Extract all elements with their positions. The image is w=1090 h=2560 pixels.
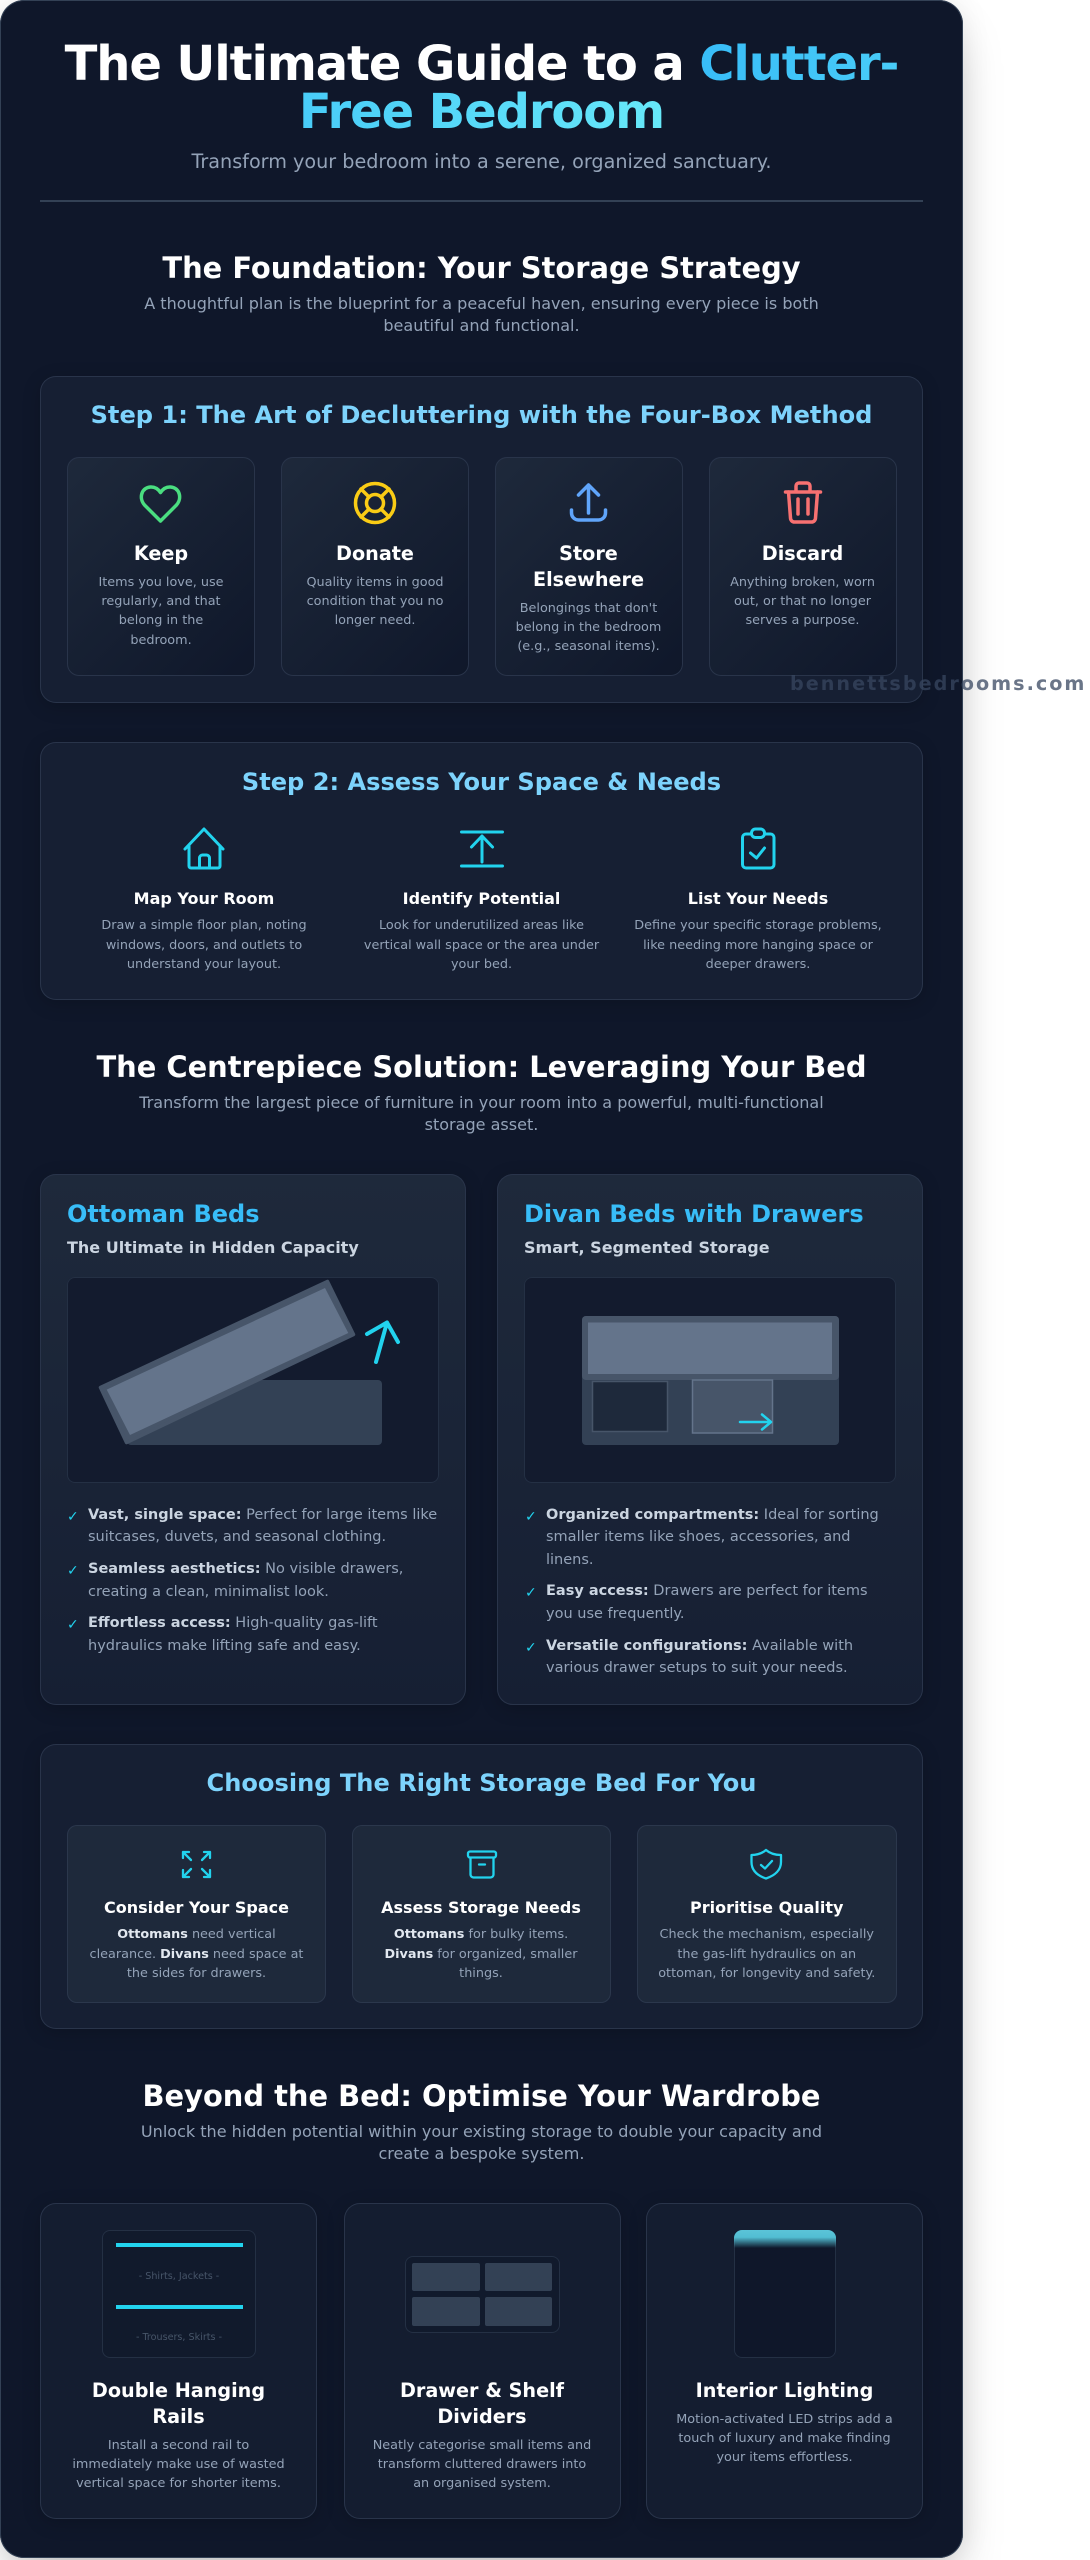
dividers title: Dividers — [437, 2405, 527, 2428]
section intro: centrepiece — [96, 1050, 867, 1134]
illustration: drawer dividers — [404, 2256, 560, 2333]
intro text — [144, 294, 819, 335]
map title — [101, 889, 307, 972]
panel: ottoman beds: ✓ — [67, 1617, 79, 1633]
panel: step 1 — [40, 376, 923, 703]
intro text: create a bespoke system. — [378, 2144, 584, 2163]
identify description — [364, 918, 600, 972]
upper rail — [116, 2243, 242, 2247]
divan title: Divan Beds with Drawers — [524, 1200, 864, 1228]
panel: choosing the right bed — [40, 1744, 923, 2029]
divan benefit 2: Easy access: Drawers are perfect for items — [546, 1583, 868, 1599]
rails title — [40, 2378, 317, 2430]
intro text: Transform the largest piece of furniture in your room into a powerful, multi-functional — [139, 1093, 824, 1112]
prioritise description — [637, 1925, 896, 1983]
discard description — [730, 575, 875, 628]
divan benefit 1: smaller items like shoes, accessories, and — [546, 1529, 851, 1545]
list description — [634, 918, 882, 972]
card: consider your space — [67, 1825, 326, 2003]
divan benefit 1: Organized compartments: Ideal for sorting — [546, 1507, 879, 1523]
ottoman benefit 1: Vast, single space: Perfect for large items like — [88, 1507, 437, 1523]
lighting description: touch of luxury and make finding — [678, 2431, 891, 2446]
icon: vertical space — [460, 830, 504, 868]
panel: divan beds — [497, 1174, 923, 1705]
dividers description — [344, 2436, 620, 2493]
consider title: Consider Your Space — [104, 1898, 289, 1917]
rails description: immediately make use of wasted — [72, 2457, 285, 2472]
card: drawer and shelf dividers — [344, 2203, 620, 2519]
prioritise description: ottoman, for longevity and safety. — [658, 1966, 875, 1981]
ottoman title: Ottoman Beds — [67, 1200, 260, 1228]
panel: divan beds: ✓ — [525, 1640, 537, 1656]
intro text: storage asset. — [425, 1115, 538, 1134]
assess title: Assess Storage Needs — [381, 1898, 581, 1917]
identify description: your bed. — [451, 957, 512, 972]
icon: heart — [140, 485, 182, 523]
store text — [516, 542, 661, 654]
identify description: Look for underutilized areas like — [379, 918, 584, 933]
ottoman benefit 3 — [67, 1615, 378, 1654]
illustration: hanging rails — [102, 2230, 256, 2358]
keep description: bedroom. — [130, 633, 192, 648]
icon: expand arrows — [182, 1850, 212, 1878]
keep title: Keep — [134, 542, 188, 565]
list heading: List Your Needs — [688, 889, 828, 908]
divan benefit 2: you use frequently. — [546, 1606, 685, 1622]
store description: (e.g., seasonal items). — [517, 639, 660, 654]
store description: Belongings that don't — [520, 601, 657, 616]
subtitle: Transform your bedroom into a serene, organized sanctuary. — [191, 150, 772, 173]
card: double hanging rails — [40, 2203, 317, 2519]
list description: like needing more hanging space or — [643, 938, 873, 953]
item: identify potential — [364, 830, 600, 972]
divan benefit 1: linens. — [546, 1552, 594, 1568]
consider description: clearance. Divans need space at — [90, 1947, 303, 1962]
rails description: vertical space for shorter items. — [76, 2476, 281, 2491]
lower label: - Trousers, Skirts - — [136, 2332, 222, 2343]
upper label: - Shirts, Jackets - — [139, 2271, 219, 2282]
list text — [634, 889, 882, 972]
donate description: condition that you no — [307, 594, 443, 609]
card: discard — [708, 457, 896, 676]
ottoman benefit 3: Effortless access: High-quality gas-lift — [88, 1615, 378, 1631]
compartment 4 — [484, 2297, 552, 2326]
store title — [533, 542, 644, 591]
map description: windows, doors, and outlets to — [106, 938, 302, 953]
donate description: Quality items in good — [306, 575, 444, 590]
card: donate — [281, 457, 469, 676]
icon: shield check — [637, 1825, 896, 2003]
panel: ottoman beds: ✓ — [67, 1563, 79, 1579]
LED light strip — [734, 2230, 836, 2248]
divan benefit 3 — [525, 1638, 853, 1676]
icon: upload — [570, 483, 608, 522]
rails description: Install a second rail to — [108, 2438, 249, 2453]
divan benefit 2 — [525, 1583, 868, 1622]
step 2 heading: Step 2: Assess Your Space & Needs — [242, 768, 721, 796]
donate title: Donate — [336, 542, 414, 565]
lighting description — [646, 2410, 923, 2468]
keep description: regularly, and that — [101, 594, 221, 609]
dividers title — [344, 2378, 620, 2430]
title: The Ultimate Guide to a Clutter- — [65, 36, 898, 92]
card: prioritise quality — [637, 1825, 896, 2003]
discard description: Anything broken, worn — [730, 575, 875, 590]
card: store elsewhere — [494, 457, 682, 676]
icon: storage box — [352, 1825, 610, 2003]
card: assess storage needs — [352, 1825, 610, 2003]
dividers title: Drawer & Shelf — [400, 2379, 564, 2402]
divan benefit 3: various drawer setups to suit your needs. — [546, 1660, 848, 1676]
panel: ottoman beds — [40, 1174, 466, 1705]
discard description: serves a purpose. — [746, 613, 859, 628]
item: list your needs — [634, 828, 882, 972]
keep text — [98, 542, 224, 648]
section intro: wardrobe — [40, 2078, 923, 2166]
identify text — [364, 889, 600, 972]
rails title: Rails — [152, 2405, 205, 2428]
prioritise description: the gas-lift hydraulics on an — [677, 1947, 856, 1962]
title — [64, 36, 898, 140]
donate description: longer need. — [335, 613, 415, 628]
dividers text — [344, 2378, 620, 2493]
keep description: Items you love, use — [98, 575, 224, 590]
icon: house — [183, 827, 225, 870]
panel: divan beds: ✓ — [525, 1509, 537, 1525]
discard description: out, or that no longer — [734, 594, 871, 609]
item: map your room — [101, 827, 307, 972]
ottoman benefit 2 — [67, 1561, 403, 1600]
assess description: things. — [459, 1966, 503, 1981]
keep description — [98, 575, 224, 648]
map description: understand your layout. — [127, 957, 281, 972]
rails description — [40, 2436, 317, 2493]
consider description — [67, 1925, 326, 1983]
card: interior lighting — [646, 2203, 923, 2519]
icon: clipboard — [741, 828, 776, 870]
rails text — [40, 2378, 317, 2493]
map heading: Map Your Room — [134, 889, 274, 908]
rails title: Double Hanging — [92, 2379, 265, 2402]
assess description — [352, 1925, 610, 1983]
dividers description: an organised system. — [413, 2476, 551, 2491]
intro text: A thoughtful plan is the blueprint for a peaceful haven, ensuring every piece is both — [144, 294, 819, 313]
divan subtitle: Smart, Segmented Storage — [524, 1238, 770, 1256]
keep description: belong in the — [119, 613, 203, 628]
assess description: Ottomans for bulky items. — [394, 1927, 568, 1942]
prioritise description: Check the mechanism, especially — [660, 1927, 874, 1942]
prioritise title: Prioritise Quality — [690, 1898, 843, 1917]
discard title: Discard — [762, 542, 843, 565]
intro text: Unlock the hidden potential within your existing storage to double your capacity and — [141, 2122, 822, 2141]
donate text — [306, 542, 444, 628]
heading: The Foundation: Your Storage Strategy — [162, 251, 801, 285]
heading: The Centrepiece Solution: Leveraging Your Bed — [96, 1050, 867, 1084]
dividers description: Neatly categorise small items and — [373, 2438, 591, 2453]
section intro: foundation — [144, 251, 819, 335]
lighting text — [646, 2378, 923, 2468]
consider description: Ottomans need vertical — [117, 1927, 276, 1942]
list description: deeper drawers. — [706, 957, 810, 972]
donate description — [306, 575, 444, 628]
title: Free Bedroom — [299, 84, 664, 140]
store description — [516, 601, 661, 654]
illustration: ottoman bed lifting — [98, 1280, 400, 1445]
map description — [101, 918, 307, 972]
divan benefit 3: Versatile configurations: Available with — [546, 1638, 853, 1654]
panel: step 2 — [40, 742, 923, 1000]
store title: Elsewhere — [533, 568, 644, 591]
ottoman benefit 3: hydraulics make lifting safe and easy. — [88, 1638, 361, 1654]
illustration frame: divan — [524, 1277, 896, 1483]
dividers description: transform cluttered drawers into — [378, 2457, 586, 2472]
icon: trash — [784, 481, 822, 524]
ottoman benefit 1: suitcases, duvets, and seasonal clothing. — [88, 1529, 386, 1545]
lighting description: your items effortless. — [716, 2450, 853, 2465]
ottoman subtitle: The Ultimate in Hidden Capacity — [67, 1238, 359, 1256]
icon: lifebuoy — [354, 482, 396, 524]
assess description: Divans for organized, smaller — [384, 1947, 578, 1962]
ottoman benefit 2: Seamless aesthetics: No visible drawers, — [88, 1561, 403, 1577]
intro text — [40, 2121, 923, 2166]
intro text: beautiful and functional. — [383, 316, 580, 335]
compartment 3 — [412, 2297, 480, 2326]
lighting title: Interior Lighting — [696, 2379, 873, 2402]
choosing heading: Choosing The Right Storage Bed For You — [207, 1769, 756, 1797]
panel: divan beds: ✓ — [525, 1585, 537, 1601]
store title: Store — [559, 542, 618, 565]
ottoman benefit 1 — [67, 1507, 437, 1545]
map description: Draw a simple floor plan, noting — [101, 918, 307, 933]
divider — [40, 200, 923, 202]
lighting description: Motion-activated LED strips add a — [676, 2412, 893, 2427]
compartment 1 — [412, 2263, 480, 2291]
lower rail — [116, 2305, 242, 2309]
identify description: vertical wall space or the area under — [364, 938, 599, 953]
compartment 2 — [484, 2263, 552, 2291]
intro text — [139, 1093, 824, 1134]
step 1 heading: Step 1: The Art of Decluttering with the Four-Box Method — [91, 401, 872, 429]
identify heading: Identify Potential — [403, 889, 560, 908]
illustration: divan bed with drawers — [582, 1316, 839, 1445]
heading: Beyond the Bed: Optimise Your Wardrobe — [142, 2079, 820, 2113]
discard text — [730, 542, 875, 628]
watermark: bennettsbedrooms.com — [790, 672, 1086, 695]
illustration: lit wardrobe — [734, 2230, 836, 2358]
header — [40, 36, 923, 202]
store description: belong in the bedroom — [516, 620, 661, 635]
list description: Define your specific storage problems, — [634, 918, 882, 933]
ottoman benefit 2: creating a clean, minimalist look. — [88, 1584, 329, 1600]
card: keep — [67, 457, 255, 676]
divan benefit 1 — [525, 1507, 879, 1568]
consider description: the sides for drawers. — [127, 1966, 266, 1981]
illustration frame: ottoman — [67, 1277, 439, 1483]
panel: ottoman beds: ✓ — [67, 1509, 79, 1525]
